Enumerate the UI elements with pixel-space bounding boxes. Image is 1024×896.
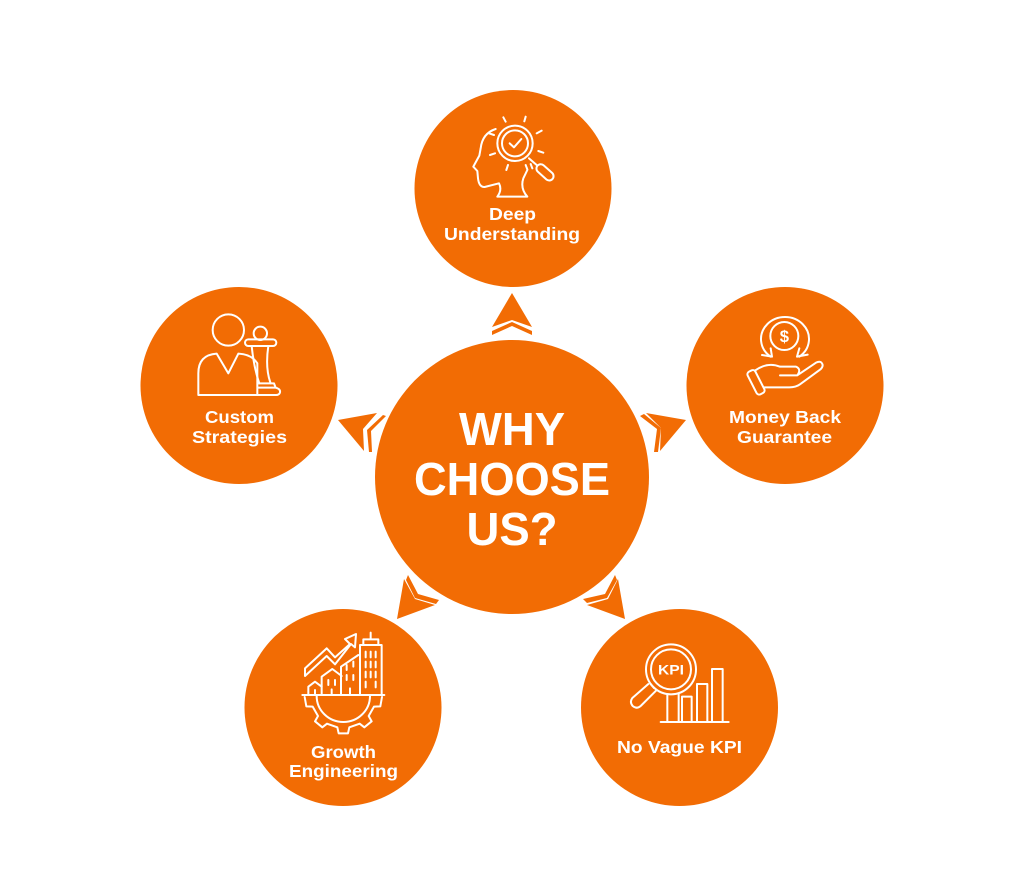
title: WHY [459, 403, 565, 455]
icon: kpi magnifier with bars [631, 644, 729, 722]
arrow: to no vague kpi [583, 575, 625, 619]
label: Understanding [444, 224, 580, 244]
panel: custom strategies [140, 287, 338, 484]
label: Guarantee [737, 427, 832, 447]
icon: head with magnifier [473, 117, 555, 197]
panel: no vague kpi [581, 609, 778, 806]
icon: kpi magnifier with bars: KPI [658, 661, 684, 677]
icon: person with chess pawn [198, 314, 280, 395]
label [729, 407, 841, 447]
title [414, 403, 610, 555]
label [289, 742, 398, 781]
arrow: to money back guarantee [640, 413, 686, 452]
panel: deep understanding [414, 90, 612, 287]
panel: money back guarantee [686, 287, 884, 484]
label: Deep [489, 204, 536, 224]
label [444, 204, 580, 244]
panel: growth engineering [244, 609, 442, 806]
label [192, 407, 287, 447]
icon: hand with coin [746, 317, 823, 396]
label: No Vague KPI [617, 737, 742, 757]
arrow: to deep understanding [492, 293, 532, 335]
label: Growth [311, 742, 376, 762]
label: Custom [205, 407, 274, 427]
title: CHOOSE [414, 453, 610, 505]
central circle [375, 340, 649, 614]
label: Engineering [289, 761, 398, 781]
label: Strategies [192, 427, 287, 447]
icon: buildings on gear with growth arrow [302, 633, 384, 733]
label: Money Back [729, 407, 841, 427]
icon: hand with coin: $ [780, 327, 790, 346]
arrow: to growth engineering [397, 575, 439, 619]
arrow: to custom strategies [338, 413, 386, 452]
title: US? [466, 503, 558, 555]
